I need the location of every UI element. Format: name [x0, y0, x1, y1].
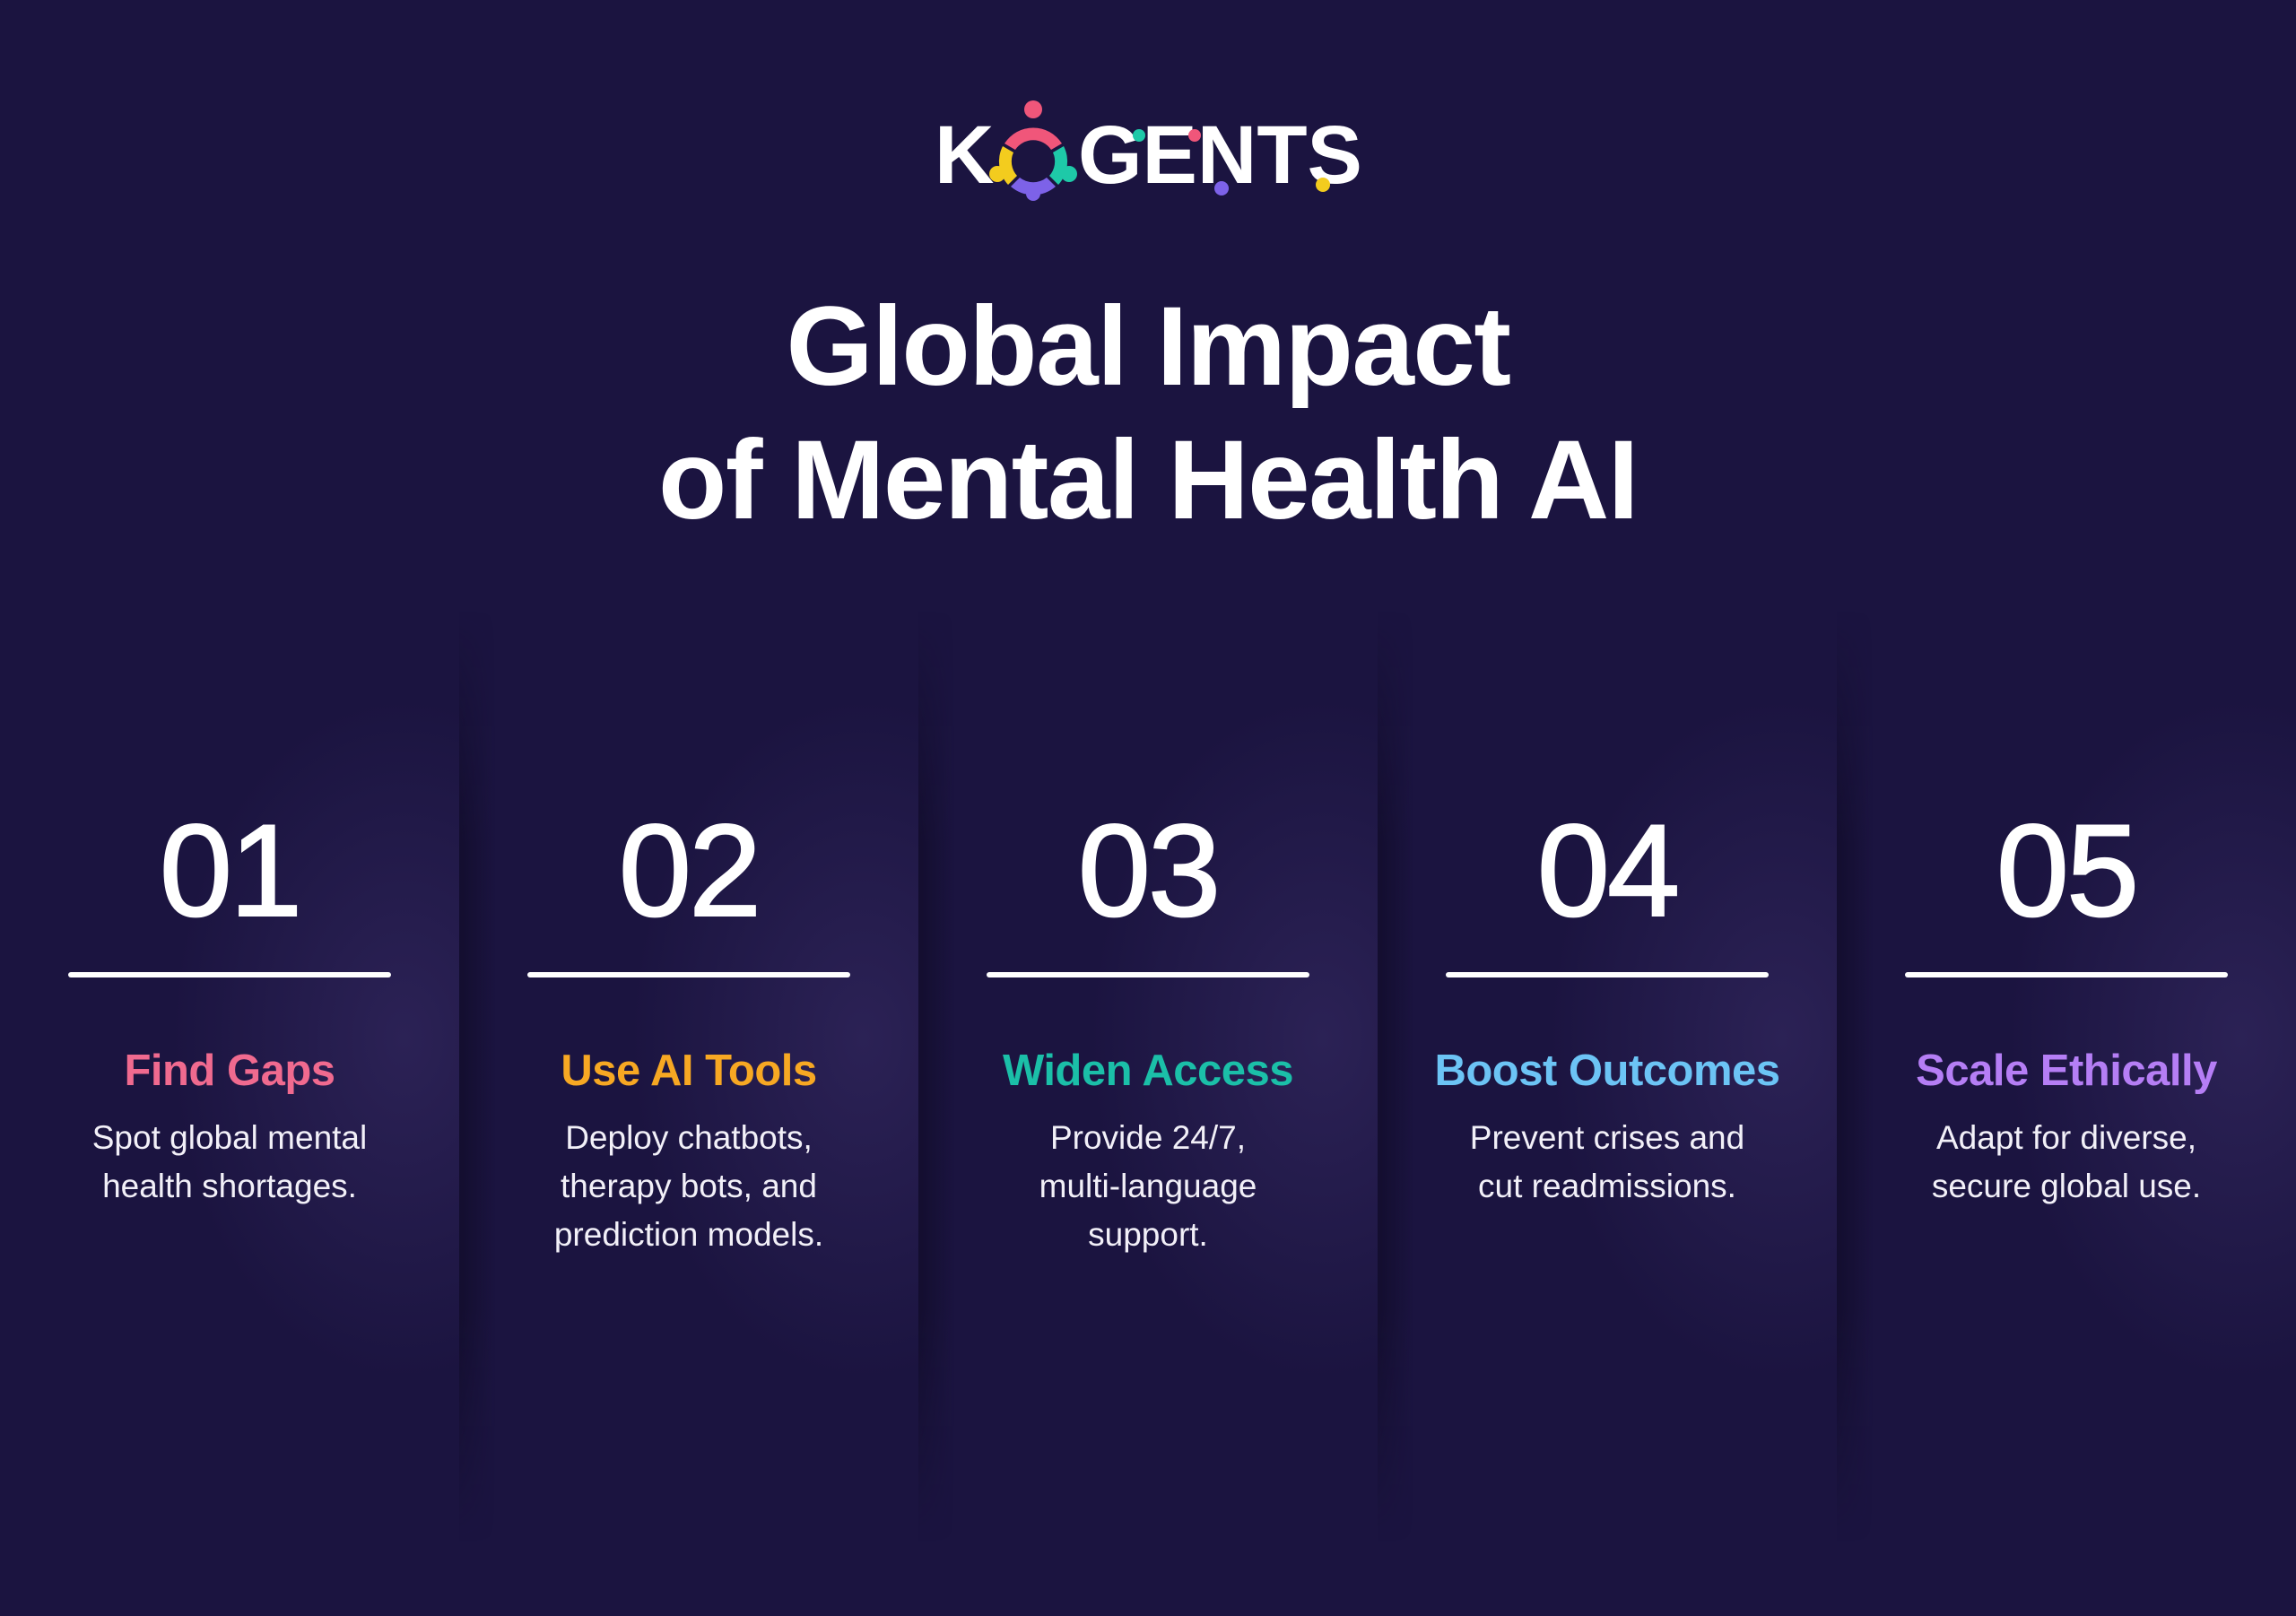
- text: 04: Prevent crises and: [1470, 1119, 1744, 1156]
- number 03: 03: [1078, 797, 1218, 943]
- title: Global Impact: [786, 284, 1510, 409]
- heading: Scale Ethically: Scale Ethically: [1916, 1047, 2217, 1095]
- text: 02: therapy bots, and: [561, 1168, 817, 1204]
- text: 03: [1039, 1119, 1257, 1253]
- number 05: 05: [1996, 797, 2136, 943]
- panel: 04: [1378, 610, 1837, 1542]
- text: 01: health shortages.: [102, 1168, 357, 1204]
- panel: 01: [0, 610, 459, 1542]
- text: 01: Spot global mental: [92, 1119, 367, 1156]
- text: 02: Deploy chatbots,: [565, 1119, 813, 1156]
- heading: Find Gaps: Find Gaps: [124, 1047, 335, 1095]
- text: 02: [554, 1119, 823, 1253]
- panel: 05: [1837, 610, 2296, 1542]
- text: 03: Provide 24/7,: [1050, 1119, 1246, 1156]
- panel: 02: [459, 610, 918, 1542]
- text: 05: Adapt for diverse,: [1936, 1119, 2196, 1156]
- logo: [935, 100, 1362, 201]
- heading: Widen Access: Widen Access: [1003, 1047, 1293, 1095]
- number 04: 04: [1537, 797, 1677, 943]
- logo: K: [935, 109, 994, 201]
- panel: 03: [918, 610, 1378, 1542]
- title: [658, 284, 1638, 543]
- text: 04: cut readmissions.: [1478, 1168, 1736, 1204]
- text: 03: support.: [1088, 1216, 1208, 1253]
- heading: Boost Outcomes: Boost Outcomes: [1434, 1047, 1780, 1095]
- number 01: 01: [160, 797, 300, 943]
- text: 01: [92, 1119, 367, 1204]
- text: 05: [1932, 1119, 2201, 1204]
- heading: Use AI Tools: Use AI Tools: [561, 1047, 817, 1095]
- text: 04: [1470, 1119, 1744, 1204]
- title: of Mental Health AI: [658, 418, 1638, 543]
- text: 05: secure global use.: [1932, 1168, 2201, 1204]
- text: 02: prediction models.: [554, 1216, 823, 1253]
- logo: GENTS: [1078, 109, 1362, 201]
- number 02: 02: [619, 797, 759, 943]
- text: 03: multi-language: [1039, 1168, 1257, 1204]
